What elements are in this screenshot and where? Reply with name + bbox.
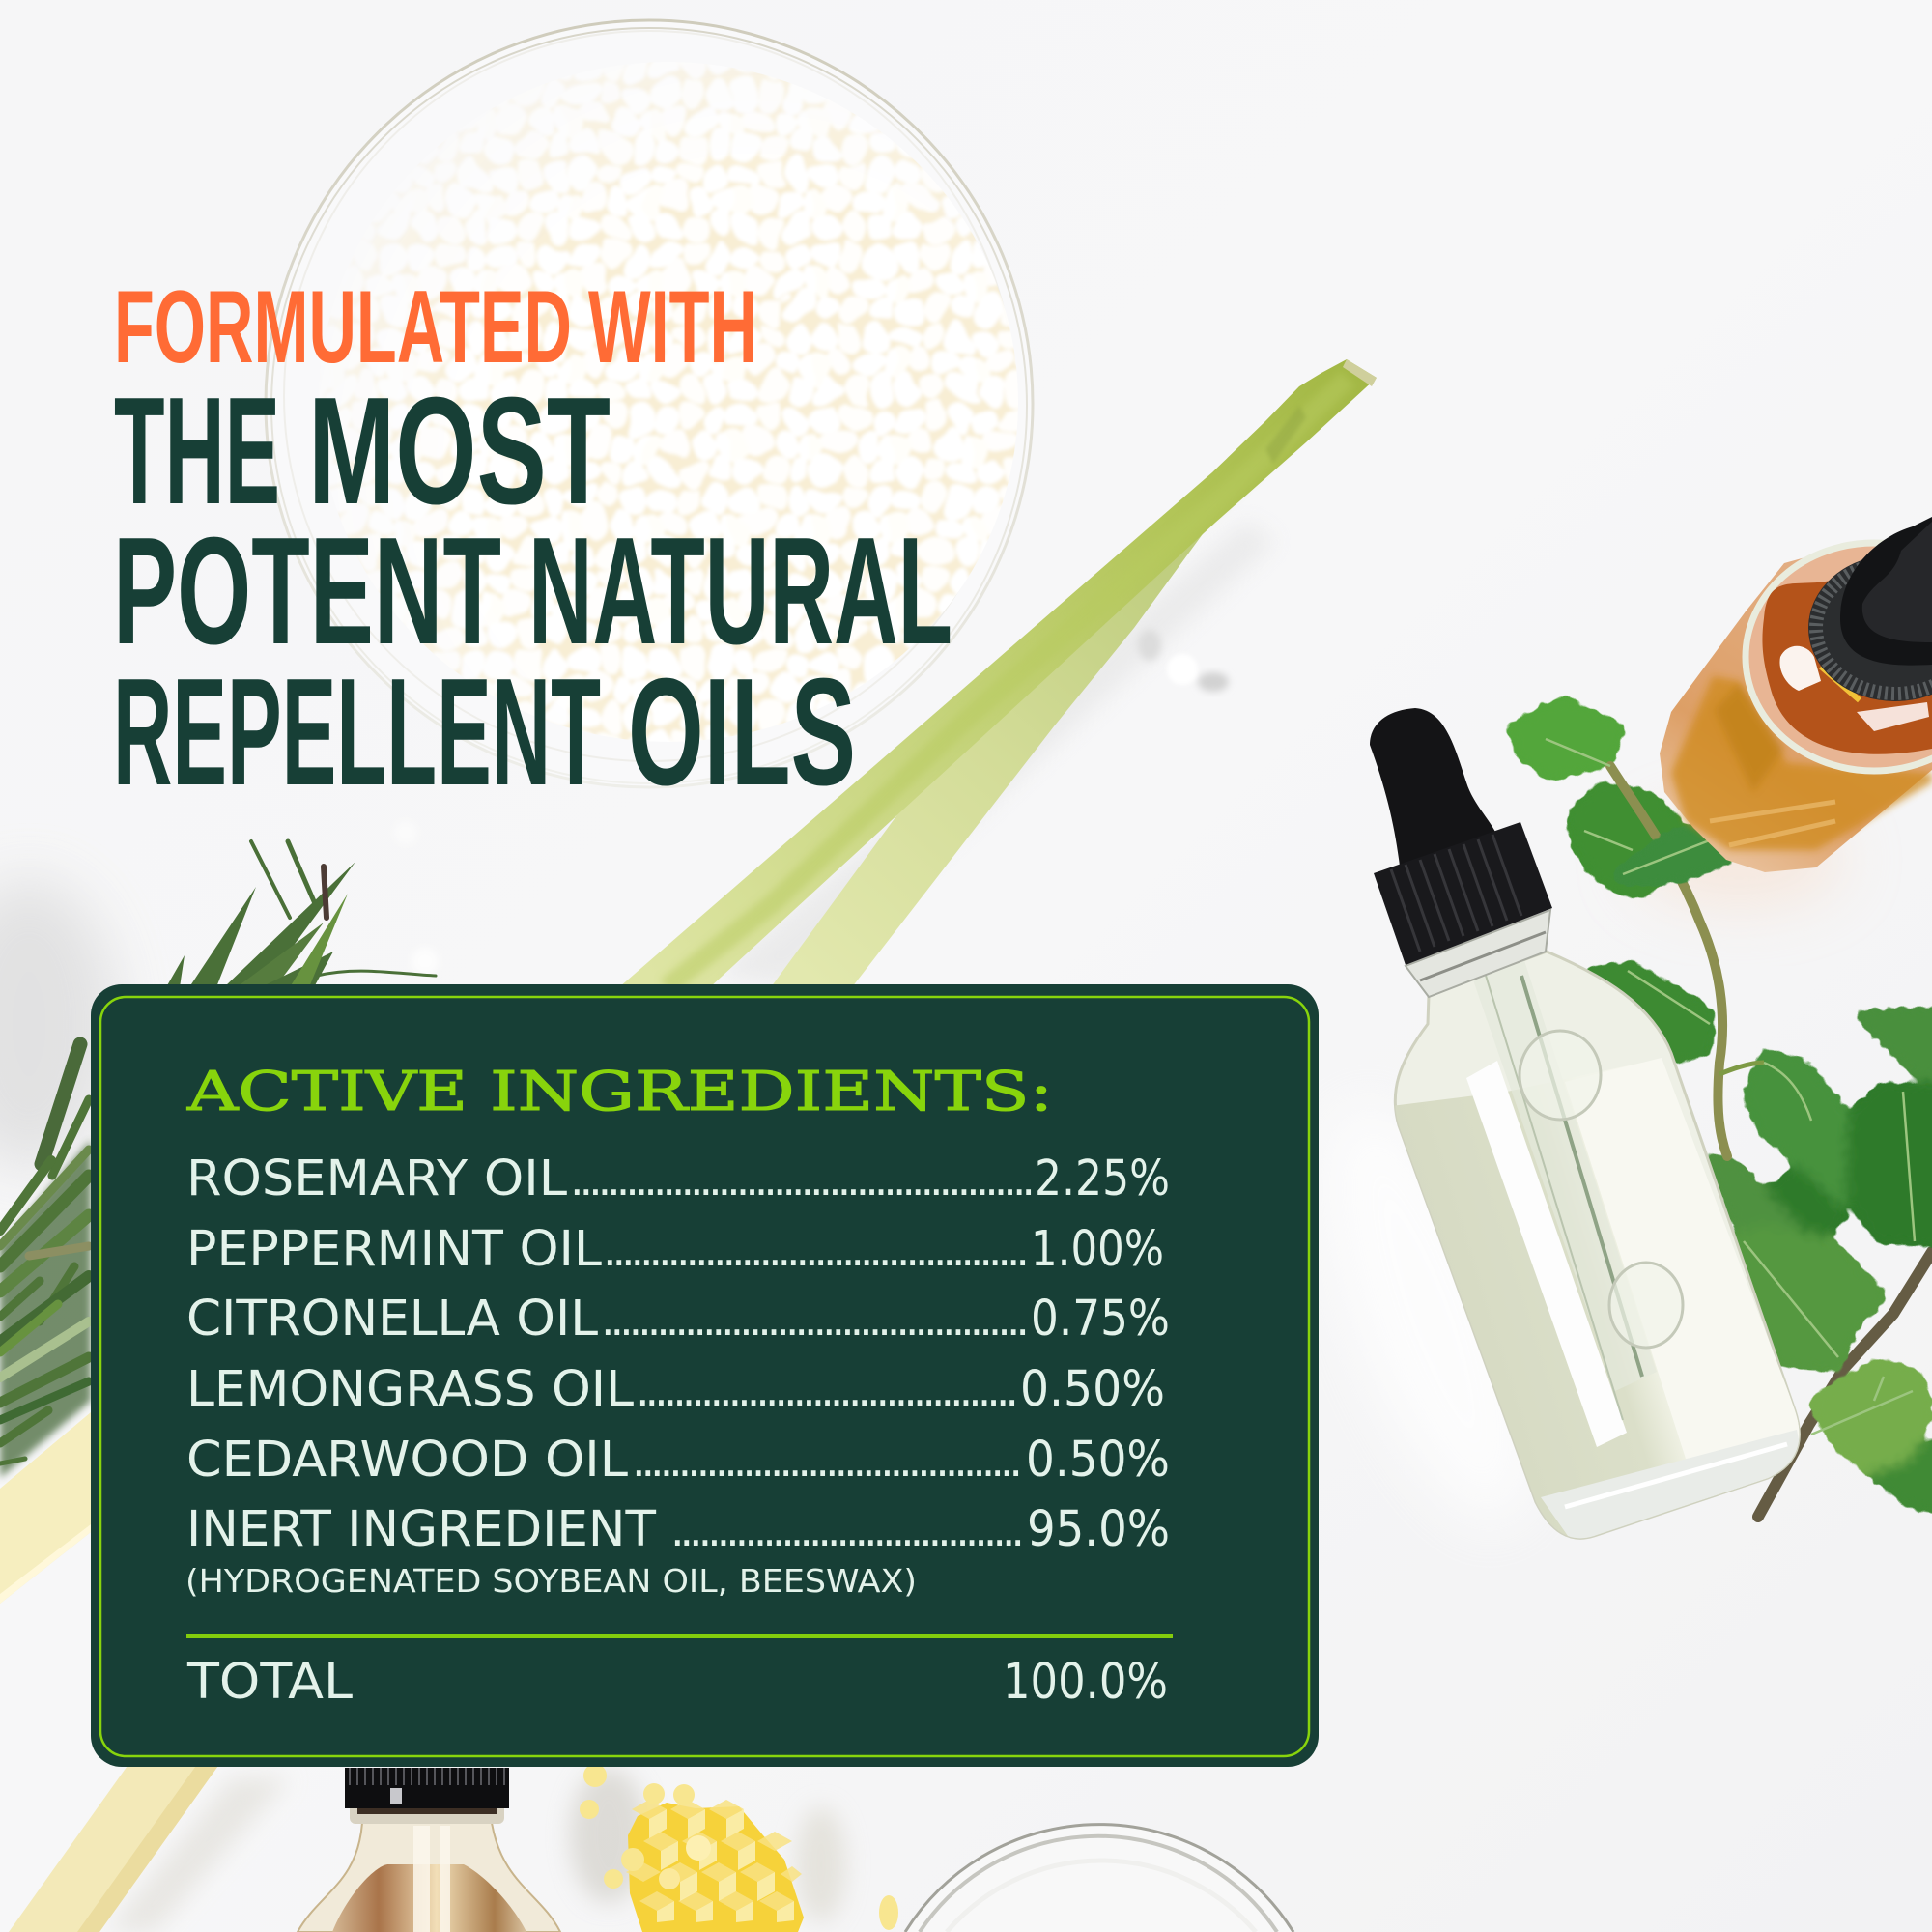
row: total: TOTAL [186, 1654, 354, 1711]
mint leaf over stem [1618, 816, 1747, 880]
title line: the most: THE [114, 366, 280, 536]
title line: repellent oils: OILS [628, 647, 856, 817]
title line: potent natural: POTENT [113, 506, 501, 676]
row: citronella oil: 0.75% [1031, 1291, 1170, 1348]
image: bottom glass dish [905, 1825, 1293, 1932]
title [113, 269, 952, 817]
row: total: 100.0% [1003, 1654, 1168, 1711]
row: rosemary oil: .................................................. [570, 1153, 1036, 1206]
title line: the most: MOST [308, 366, 611, 536]
image: lemongrass stalks [0, 359, 1377, 1932]
honeycomb cell tops [626, 1800, 802, 1911]
row: citronella oil: .............................................. [601, 1293, 1030, 1346]
title line: formulated with: FORMULATED [114, 269, 572, 384]
row: lemongrass oil [186, 1361, 1165, 1418]
row: cedarwood oil [186, 1432, 1170, 1489]
row: cedarwood oil: 0.50% [1026, 1432, 1170, 1489]
row: cedarwood oil: CEDARWOOD OIL [186, 1432, 629, 1489]
row: rosemary oil: ROSEMARY OIL [186, 1151, 568, 1208]
row: citronella oil: CITRONELLA OIL [186, 1291, 599, 1348]
total divider [186, 1634, 1173, 1638]
row: cedarwood oil: .......................................... [632, 1435, 1023, 1487]
inert ingredient note: (HYDROGENATED SOYBEAN OIL, BEESWAX) [185, 1562, 917, 1600]
panel: active ingredients [91, 984, 1319, 1767]
row: inert ingredient: 95.0% [1027, 1501, 1170, 1558]
panel heading: ACTIVE INGREDIENTS: [186, 1061, 1053, 1123]
row: lemongrass oil: ......................................... [636, 1364, 1019, 1416]
row: lemongrass oil: LEMONGRASS OIL [186, 1361, 635, 1418]
image: rosemary sprig [0, 841, 436, 1478]
image: honeycomb and wax drops [580, 1764, 898, 1932]
image: petri dish of white beads [266, 20, 1043, 787]
row: peppermint oil: PEPPERMINT OIL [186, 1221, 603, 1278]
image: mint sprig [1511, 699, 1932, 1517]
row: inert ingredient: INERT INGREDIENT [186, 1501, 657, 1558]
row: inert ingredient: ...................................... [670, 1504, 1025, 1556]
image: clear dropper bottle [1370, 708, 1801, 1540]
row: inert ingredient [186, 1501, 1170, 1558]
row: citronella oil [186, 1291, 1170, 1348]
image: bottom glass bottle [298, 1768, 560, 1932]
title line: the most [114, 366, 611, 536]
title line: repellent oils: REPELLENT [113, 647, 601, 817]
row: rosemary oil [186, 1151, 1170, 1208]
row: total [186, 1654, 1168, 1711]
title line: potent natural: NATURAL [528, 506, 952, 676]
row: lemongrass oil: 0.50% [1020, 1361, 1165, 1418]
image: stray beads [394, 630, 1229, 975]
row: rosemary oil: 2.25% [1035, 1151, 1170, 1208]
row: peppermint oil: .............................................. [603, 1224, 1030, 1276]
soft shadows on the surface [0, 522, 1845, 1932]
image: amber dropper bottle [1660, 517, 1932, 872]
wax drops [580, 1764, 898, 1930]
row: peppermint oil: 1.00% [1031, 1221, 1164, 1278]
honeycomb cell right faces [649, 1809, 794, 1922]
title line: formulated with: WITH [588, 269, 757, 384]
row: peppermint oil [186, 1221, 1164, 1278]
